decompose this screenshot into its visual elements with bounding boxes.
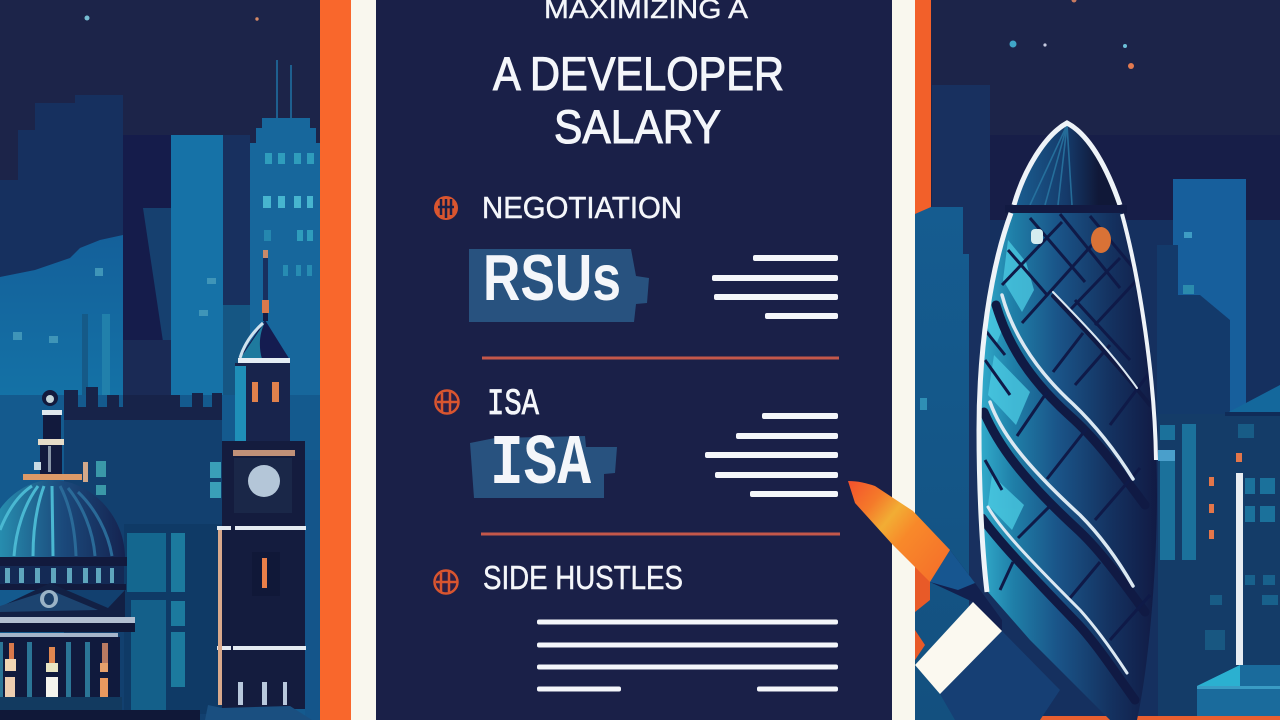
dome orange ring <box>23 474 82 480</box>
tower roof <box>238 320 290 360</box>
mid band behind wall <box>0 395 320 720</box>
back dark building <box>932 85 990 720</box>
bottom orange sliver <box>1032 716 1280 720</box>
right orange stripe upper <box>915 0 931 214</box>
pencil ferrule <box>930 550 975 590</box>
tall tower with antennas <box>250 60 320 420</box>
cornice <box>0 617 135 623</box>
title: SALARY <box>554 100 721 153</box>
label: ISA: ISA <box>490 425 591 505</box>
tower orange slit <box>252 552 280 596</box>
tower shaft <box>222 441 305 709</box>
tower bands <box>217 526 306 650</box>
icon: coin <box>434 570 458 594</box>
label: RSUs: RSUs <box>483 241 621 314</box>
left orange stripe <box>320 0 351 720</box>
tower base pillars <box>238 682 287 705</box>
right-edge shade <box>305 460 320 720</box>
pencil handle <box>930 550 1002 631</box>
text lines <box>537 620 838 692</box>
title: A DEVELOPER <box>493 47 784 100</box>
gherkin windows <box>1031 229 1043 244</box>
text lines <box>705 413 838 497</box>
section: side hustles <box>434 559 838 692</box>
sleeve <box>940 631 1060 720</box>
grid lines <box>985 214 1150 640</box>
divider <box>481 532 840 536</box>
right orange stripe lower fragments <box>915 560 930 660</box>
pencil and hand <box>848 481 1060 720</box>
pediment <box>0 583 125 617</box>
section: ISA <box>436 384 838 505</box>
bright tower <box>171 135 223 400</box>
lower blue building mass <box>0 235 123 400</box>
building lights <box>1209 453 1242 539</box>
narrow mid building <box>223 135 250 305</box>
clock tower <box>205 250 312 720</box>
clock face <box>248 465 280 497</box>
heading: ISA <box>487 384 540 426</box>
gherkin dark collar <box>1005 205 1127 213</box>
distant dark building <box>0 95 123 400</box>
dark gap building <box>123 135 171 400</box>
scattered lit windows <box>13 268 216 343</box>
teal squares <box>96 461 106 477</box>
panel: central navy column <box>376 0 892 720</box>
title <box>493 0 784 153</box>
domed building <box>0 390 200 720</box>
tower pole <box>218 530 222 705</box>
gherkin body <box>977 213 1157 720</box>
pencil tip <box>848 481 950 582</box>
gherkin outline <box>979 213 1011 592</box>
teal side windows <box>210 462 221 498</box>
far right dark building <box>990 220 1280 720</box>
spiral white lines <box>988 292 1137 673</box>
left blue building <box>915 207 969 720</box>
heading: NEGOTIATION <box>482 190 682 225</box>
light panes <box>986 240 1034 530</box>
icon: coin <box>436 390 458 414</box>
gherkin tower <box>434 0 1157 720</box>
left cream stripe <box>351 0 376 720</box>
panel content <box>434 0 840 692</box>
hall windows <box>5 643 108 700</box>
tower shadow <box>1157 245 1230 420</box>
dark spiral bands <box>982 296 1150 700</box>
divider <box>482 356 839 360</box>
belfry <box>235 363 290 445</box>
icon: coin <box>434 196 458 220</box>
stars <box>84 0 1134 69</box>
dome ribs <box>0 480 125 558</box>
white pole <box>1236 473 1243 665</box>
heading: SIDE HUSTLES <box>483 559 683 596</box>
gherkin cap <box>1013 122 1120 205</box>
blue tower right <box>1173 179 1246 420</box>
slim pillars <box>82 314 88 396</box>
white cuff <box>915 602 1002 694</box>
left skyline scene <box>0 60 320 720</box>
columned hall <box>0 637 120 699</box>
section: negotiation <box>434 190 838 322</box>
text lines <box>712 255 838 319</box>
right cream stripe <box>892 0 915 720</box>
lower right building <box>1158 385 1280 720</box>
cyan box <box>1197 665 1280 720</box>
castle wall with merlons <box>64 387 224 720</box>
drum and colonnade <box>0 557 127 566</box>
lantern <box>34 390 64 475</box>
spire <box>262 250 269 321</box>
dark sky block <box>990 135 1280 220</box>
right skyline scene <box>915 85 1280 720</box>
